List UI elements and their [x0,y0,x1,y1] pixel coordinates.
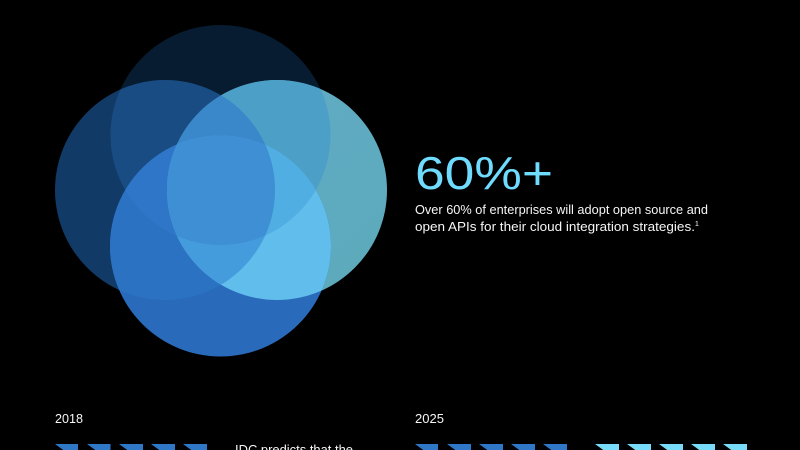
overlap: right and bottom [177,145,331,300]
circle: bottom [110,136,331,356]
overlap: top, left and right [177,96,266,145]
overlap: left and bottom [110,144,176,290]
stat description: 1 [695,221,699,228]
overlap: top and left [110,80,221,190]
circle: left [55,80,275,300]
stat description [415,202,708,234]
circle: right [167,80,387,300]
big stat: 60%+: 60%+ [415,147,553,199]
overlap: all four circles [167,136,275,245]
label: 2018: 2018 [55,411,83,426]
chevrons: 2018 [55,444,207,450]
label: 2025: 2025 [415,411,444,426]
overlap: top and right [177,80,330,190]
overlapping circles diagram [55,25,387,356]
overlap: top, left and bottom [125,144,176,190]
circle: top [110,25,330,245]
stat description: open APIs for their cloud integration strategies. [415,219,685,234]
overlap: left, right and bottom [178,236,265,284]
chevrons: 2025 light [595,444,747,450]
overlap: top, right and bottom [266,146,316,236]
stat description: Over 60% of enterprises will adopt open source and [415,202,708,217]
chevrons: 2025 blue [415,444,567,450]
